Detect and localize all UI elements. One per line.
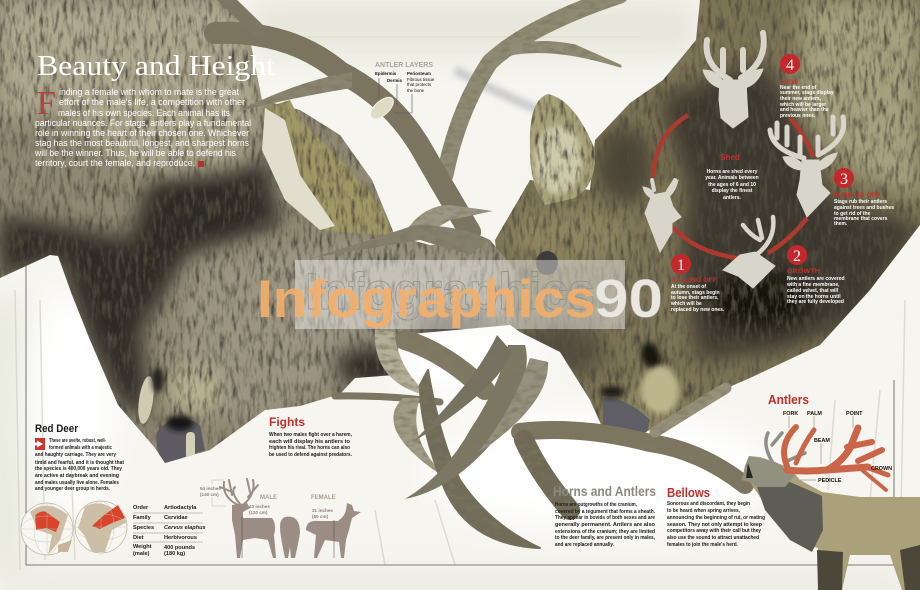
table: classification: Diet: [133, 535, 144, 541]
drop cap: F: [37, 85, 56, 122]
center text: shed: [705, 153, 759, 201]
panel: antler layers: Epidermis: [375, 71, 397, 76]
table: classification: Artiodactyla: [164, 505, 197, 511]
step 1: [670, 254, 725, 313]
table: classification: Species: [133, 525, 154, 531]
step 4: previous ones.: [780, 113, 816, 119]
diagram: antler growth cycle: [643, 33, 894, 313]
text block: intro: [34, 85, 251, 169]
left stag main antler: [215, 33, 470, 232]
step 1: At the onset of: [671, 284, 706, 290]
table: classification: Order: [133, 505, 149, 511]
height labels: (140 cm): [200, 492, 219, 497]
text: title: Beauty and Height: [37, 51, 275, 82]
panel: horns and antlers: Horns are outgrowths of the cranium,: [555, 502, 637, 508]
antler labels: PALM: [807, 411, 822, 417]
lower left body of antler: [405, 340, 485, 390]
height labels: (80 cm): [312, 514, 329, 519]
left stag top branch: [222, 0, 258, 30]
frame lines: [26, 262, 920, 565]
panel: horns and antlers: and are replaced annually.: [555, 542, 614, 548]
right deer fur: [495, 0, 920, 433]
antler labels: Antlers: [768, 392, 809, 407]
cycle ring: [653, 115, 813, 258]
central tines: [408, 205, 493, 235]
lower horizontal antler: [335, 396, 440, 402]
step 4: and heavier than the: [780, 107, 829, 113]
panel: red deer: the species is 400,000 years old. They: [35, 466, 123, 472]
table: classification: 400 pounds: [164, 545, 195, 551]
left deer ear: [262, 100, 395, 236]
step 2: with a fine membrane,: [786, 282, 840, 288]
panel: bellows: Sonorous and discordant, they begin: [667, 501, 750, 507]
step 1: which will be: [670, 301, 702, 307]
table: classification: Weight: [133, 544, 152, 550]
panel: antler layers: that protects: [407, 82, 432, 87]
panel: horns and antlers: [553, 483, 656, 548]
step 4: Near the end of: [780, 85, 817, 91]
step 4: summer, stags display: [780, 90, 834, 96]
icon: red arrow: [35, 438, 45, 450]
step 1: to lose their antlers,: [671, 295, 719, 301]
globe: north america range: [21, 503, 73, 555]
step 2: New antlers are covered: [787, 276, 845, 282]
panel: bellows: competitors away with their call but they: [667, 528, 762, 534]
panel: fights: Fights: [269, 415, 305, 429]
text block: intro: territory, court the female, and reproduce.: [35, 158, 195, 169]
height labels: (110 cm): [249, 510, 268, 515]
antler labels: POINT: [846, 411, 863, 417]
center text: shed: antlers.: [723, 195, 741, 201]
text block: intro: will be the winner. Thus, he will be able to defend his: [34, 148, 236, 159]
height labels: 31 inches: [312, 508, 333, 513]
step 1: autumn, stags begin: [671, 290, 720, 296]
step 3: [833, 168, 894, 227]
right stag upper tine: [482, 43, 620, 66]
panel: horns and antlers: generally permanent. Antlers are also: [555, 522, 656, 528]
left stag side tine: [236, 72, 352, 112]
text block: intro: effort of the male's life, a competition with other: [59, 97, 246, 108]
panel: fights: frighten his rival. The horns can also: [269, 445, 350, 451]
panel: red deer: timid and fearful, and it is thought that: [35, 460, 124, 466]
stag head 1: [643, 180, 681, 252]
center text: shed: Shed: [720, 153, 740, 162]
panel: red deer: [35, 423, 124, 492]
text block: intro: stag has the most beautiful, longest, and sharpest horns: [35, 138, 249, 149]
step 3: membrane that covers: [834, 216, 888, 222]
panel: antler layers: the bone: [407, 88, 425, 93]
chart: deer height silhouettes: [200, 479, 361, 558]
silhouette: rear view: [280, 517, 300, 558]
watermark: [257, 260, 663, 329]
panel: bellows: season. They not only attempt to keep: [667, 522, 763, 528]
table: classification: Family: [133, 515, 152, 521]
orange antler: [784, 427, 888, 490]
left deer fur: [0, 0, 515, 463]
step 3: to get rid of the: [834, 211, 871, 217]
step 1: FALLING OFF: [672, 277, 717, 284]
step 1: replaced by new ones.: [671, 307, 725, 313]
panel: red deer: are active at daybreak and evening: [35, 473, 120, 479]
text block: intro: males of his own species. Each animal has its: [58, 108, 230, 119]
panel: antler layers: [367, 62, 435, 123]
height labels: 54 inches: [200, 486, 221, 491]
panel: antler layers: Fibrous tissue: [407, 77, 435, 82]
long lower antler: [420, 370, 540, 548]
step 2: stay on the horns until: [787, 294, 841, 300]
panel: antler layers: Periosteum: [407, 71, 431, 76]
panel: fights: When two males fight over a harem,: [269, 432, 352, 438]
watermark: Infographics: [257, 270, 596, 329]
step 2: [786, 245, 845, 305]
stag head 4: [703, 33, 764, 128]
step 3: RUBBING OFF: [833, 192, 880, 199]
step 4: 4: [786, 57, 794, 74]
real antler in grey: [766, 433, 805, 463]
center text: shed: Horns are shed every: [707, 169, 758, 175]
antler labels: PEDICLE: [818, 478, 842, 484]
table: classification: Cervus elaphus: [164, 525, 206, 531]
step 2: GROWTH: [787, 268, 820, 275]
table: classification: [133, 505, 206, 557]
right stag upper antler: [445, 0, 620, 175]
watermark: 90: [594, 269, 663, 329]
antler labels: BEAM: [814, 438, 830, 444]
table: classification: Cervidae: [164, 515, 188, 521]
antler labels: [768, 392, 892, 484]
center text: shed: the ages of 6 and 10: [708, 182, 756, 188]
text block: intro: inding a female with whom to mate is the great: [59, 87, 239, 98]
height labels: [200, 486, 336, 519]
lower pale tine: [375, 330, 433, 397]
stag head 3: [770, 117, 844, 217]
table: classification: (male): [133, 551, 150, 557]
crossing tines: [405, 345, 527, 499]
panel: red deer: and younger deer group in herds.: [35, 486, 110, 492]
step 3: them.: [834, 221, 848, 227]
step 4: NEW: [781, 79, 799, 86]
watermark: Infographics: [305, 263, 595, 321]
panel: red deer: Red Deer: [35, 423, 79, 435]
illustration: bellowing stag: [742, 456, 920, 590]
panel: horns and antlers: Horns and Antlers: [553, 483, 656, 499]
right deer ear: [530, 94, 595, 205]
panel: red deer: and males usually live alone. Females: [35, 480, 119, 486]
lower right branch: [655, 388, 726, 432]
step 4: which will be larger: [779, 102, 826, 108]
step 2: 2: [793, 248, 801, 265]
step 3: against trees and bushes: [834, 205, 894, 211]
antler labels: FORK: [783, 411, 798, 417]
panel: bellows: to be heard when spring arrives,: [667, 508, 740, 514]
table: classification: (180 kg): [164, 551, 185, 557]
step 4: their new antlers,: [780, 96, 822, 102]
step 3: 3: [840, 171, 848, 188]
panel: fights: each will display his antlers to: [269, 439, 351, 445]
panel: bellows: Bellows: [667, 485, 710, 500]
lower right main antler: [520, 430, 745, 485]
panel: bellows: [667, 485, 765, 548]
silhouette: male: [220, 479, 276, 558]
table: classification: Herbivorous: [164, 535, 197, 541]
antler leaders: [789, 416, 870, 480]
center text: shed: year. Animals between: [705, 175, 759, 181]
step 4: [779, 54, 834, 119]
height labels: MALE: [260, 495, 277, 501]
panel: horns and antlers: covered by a tegument that forms a sheath.: [555, 509, 655, 515]
panel: antler layers: Dermis: [387, 78, 402, 83]
text block: intro: particular nuances. For stags, antlers play a fundamental: [35, 118, 251, 129]
height labels: FEMALE: [311, 495, 336, 501]
lower curved tine: [393, 398, 450, 481]
antler labels: CROWN: [871, 466, 892, 472]
height labels: 43 inches: [249, 504, 270, 509]
globe: eurasia range: [75, 501, 127, 553]
antlers of both stags: [215, 0, 745, 548]
panel: red deer: and haughty carriage. They are very: [35, 452, 117, 458]
panel: horns and antlers: to the deer family, are present only in males,: [555, 535, 655, 541]
panel: horns and antlers: extensions of the cranium; they are limited: [555, 529, 656, 535]
step 3: Stags rub their antlers: [834, 199, 887, 205]
lower right descending branch: [524, 440, 570, 510]
panel: red deer: These are svelte, robust, well-: [49, 438, 106, 444]
panel: red deer: formed animals with a majestic: [49, 445, 112, 451]
panel: antler layers: ANTLER LAYERS: [375, 62, 433, 69]
panel: horns and antlers: They appear in bovids of both sexes and are: [555, 515, 655, 521]
stag head 2: [723, 217, 775, 288]
panel: fights: [269, 415, 352, 458]
step 1: 1: [677, 257, 685, 274]
diagram: antler parts: [766, 392, 892, 490]
panel: fights: be used to defend against predators.: [269, 452, 352, 458]
step 2: called velvet, that will: [787, 288, 839, 294]
silhouette: female: [306, 503, 361, 558]
step 2: they are fully developed: [787, 299, 844, 305]
panel: bellows: also use the sound to attract unattached: [667, 535, 759, 541]
panel: bellows: females to join the male's herd.: [667, 542, 738, 548]
panel: bellows: announcing the beginning of rut, or mating: [667, 515, 765, 521]
text block: intro: role in winning the heart of their chosen one. Whichever: [35, 128, 250, 139]
center text: shed: display the finest: [712, 188, 753, 194]
